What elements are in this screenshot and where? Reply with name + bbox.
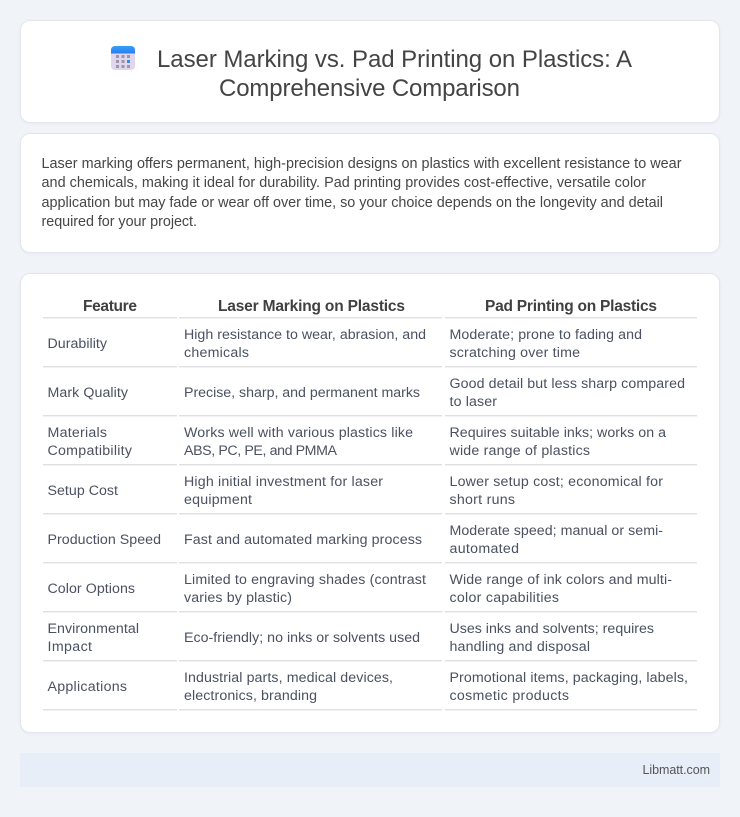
- table header: Laser Marking on Plastics: Laser Marking on Plastics: [218, 298, 405, 315]
- row: Color Options: Color Options: [48, 581, 135, 597]
- title: [157, 46, 632, 102]
- row: Environmental Impact: Uses inks and solvents; requires: [450, 621, 654, 637]
- row: Durability: [48, 327, 642, 361]
- row: Environmental Impact: handling and disposal: [450, 639, 590, 655]
- row: Materials Compatibility: Works well with various plastics like: [184, 425, 413, 441]
- row: Materials Compatibility: [48, 425, 666, 459]
- row: Production Speed: automated: [450, 541, 519, 557]
- row: Applications: Applications: [48, 679, 127, 695]
- row: Durability: Durability: [48, 336, 108, 352]
- row: Environmental Impact: Impact: [48, 639, 92, 655]
- row: Setup Cost: Setup Cost: [48, 483, 118, 499]
- row: Production Speed: [48, 523, 663, 557]
- title: Comprehensive Comparison: [219, 75, 520, 102]
- footer text: Libmatt.com: [642, 763, 710, 777]
- row: Mark Quality: Mark Quality: [48, 385, 129, 401]
- row: Environmental Impact: Eco-friendly; no inks or solvents used: [184, 630, 420, 646]
- row: Materials Compatibility: Compatibility: [48, 443, 133, 459]
- row: Color Options: color capabilities: [450, 590, 559, 606]
- row: Production Speed: Production Speed: [48, 532, 161, 548]
- row: Setup Cost: short runs: [450, 492, 515, 508]
- row: Applications: electronics, branding: [184, 688, 317, 704]
- intro text: required for your project.: [42, 214, 197, 230]
- row: Color Options: Limited to engraving shades (contrast: [184, 572, 426, 588]
- title: Laser Marking vs. Pad Printing on Plastics: A: [157, 46, 632, 73]
- row: Mark Quality: to laser: [450, 394, 497, 410]
- table card: [20, 273, 720, 733]
- row: Applications: cosmetic products: [450, 688, 569, 704]
- table header: Feature: Feature: [83, 298, 137, 315]
- row: Setup Cost: [48, 474, 663, 508]
- row: Applications: Industrial parts, medical devices,: [184, 670, 393, 686]
- table header: Pad Printing on Plastics: Pad Printing on Plastics: [485, 298, 657, 315]
- row: Durability: High resistance to wear, abrasion, and: [184, 327, 426, 343]
- row: Production Speed: Moderate speed; manual or semi-: [450, 523, 663, 539]
- row: Environmental Impact: [48, 621, 654, 655]
- row: Color Options: [48, 572, 672, 606]
- row: Durability: Moderate; prone to fading and: [450, 327, 642, 343]
- row: Color Options: Wide range of ink colors and multi-: [450, 572, 672, 588]
- row: Materials Compatibility: wide range of plastics: [448, 443, 590, 459]
- row: Durability: scratching over time: [450, 345, 580, 361]
- row: Color Options: varies by plastic): [184, 590, 292, 606]
- title card: [20, 20, 720, 123]
- intro card: [20, 133, 720, 253]
- row: Durability: chemicals: [184, 345, 249, 361]
- row: Mark Quality: Precise, sharp, and permanent marks: [184, 385, 420, 401]
- intro text: application but may fade or wear off over time, so your choice depends on the longevity and detail: [42, 195, 663, 211]
- row: Setup Cost: Lower setup cost; economical for: [450, 474, 663, 490]
- intro text: and chemicals, making it ideal for durability. Pad printing provides cost-effective, versatile color: [42, 175, 646, 191]
- intro text: [42, 156, 682, 230]
- footer bar: [20, 753, 720, 787]
- row: Applications: [48, 670, 688, 704]
- icon: calendar grid: [111, 46, 135, 70]
- intro text: Laser marking offers permanent, high-precision designs on plastics with excellent resistance to wear: [42, 156, 682, 172]
- row: Setup Cost: equipment: [184, 492, 252, 508]
- row: Materials Compatibility: Materials: [48, 425, 107, 441]
- row: Applications: Promotional items, packaging, labels,: [450, 670, 688, 686]
- row: Mark Quality: Good detail but less sharp compared: [450, 376, 685, 392]
- row: Environmental Impact: Environmental: [48, 621, 139, 637]
- row: Materials Compatibility: Requires suitable inks; works on a: [450, 425, 666, 441]
- row: Mark Quality: [48, 376, 685, 410]
- row: Setup Cost: High initial investment for laser: [184, 474, 383, 490]
- row: Materials Compatibility: ABS, PC, PE, and PMMA: [184, 443, 338, 459]
- row: Production Speed: Fast and automated marking process: [184, 532, 422, 548]
